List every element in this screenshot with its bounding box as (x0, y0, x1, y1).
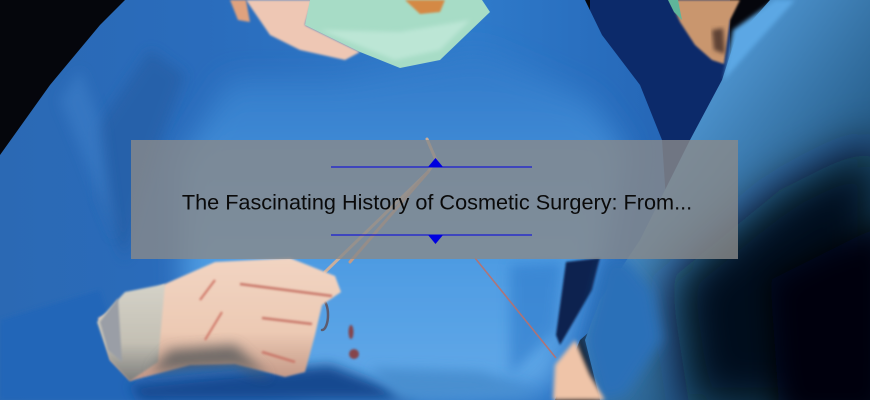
finger shadows and blood (240, 284, 332, 362)
top divider with upward triangle (331, 158, 532, 168)
patient at bottom right (553, 340, 605, 400)
dark gap between figures (556, 258, 600, 345)
suture thread (475, 258, 556, 358)
assistant gown, right foreground (585, 0, 870, 400)
translucent title panel (131, 140, 738, 259)
assistant at upper right: face (668, 0, 740, 64)
glove cuff (97, 284, 165, 381)
bottom divider with downward triangle (331, 234, 532, 244)
patient skin at neck (230, 0, 360, 60)
title text: The Fascinating History of Cosmetic Surgery: From... (182, 190, 692, 214)
surgical mask (305, 0, 490, 68)
blood marks on gown (348, 325, 359, 359)
forceps (322, 139, 436, 330)
gloved hand (97, 258, 341, 381)
surgeon gown, central figure (0, 0, 670, 400)
